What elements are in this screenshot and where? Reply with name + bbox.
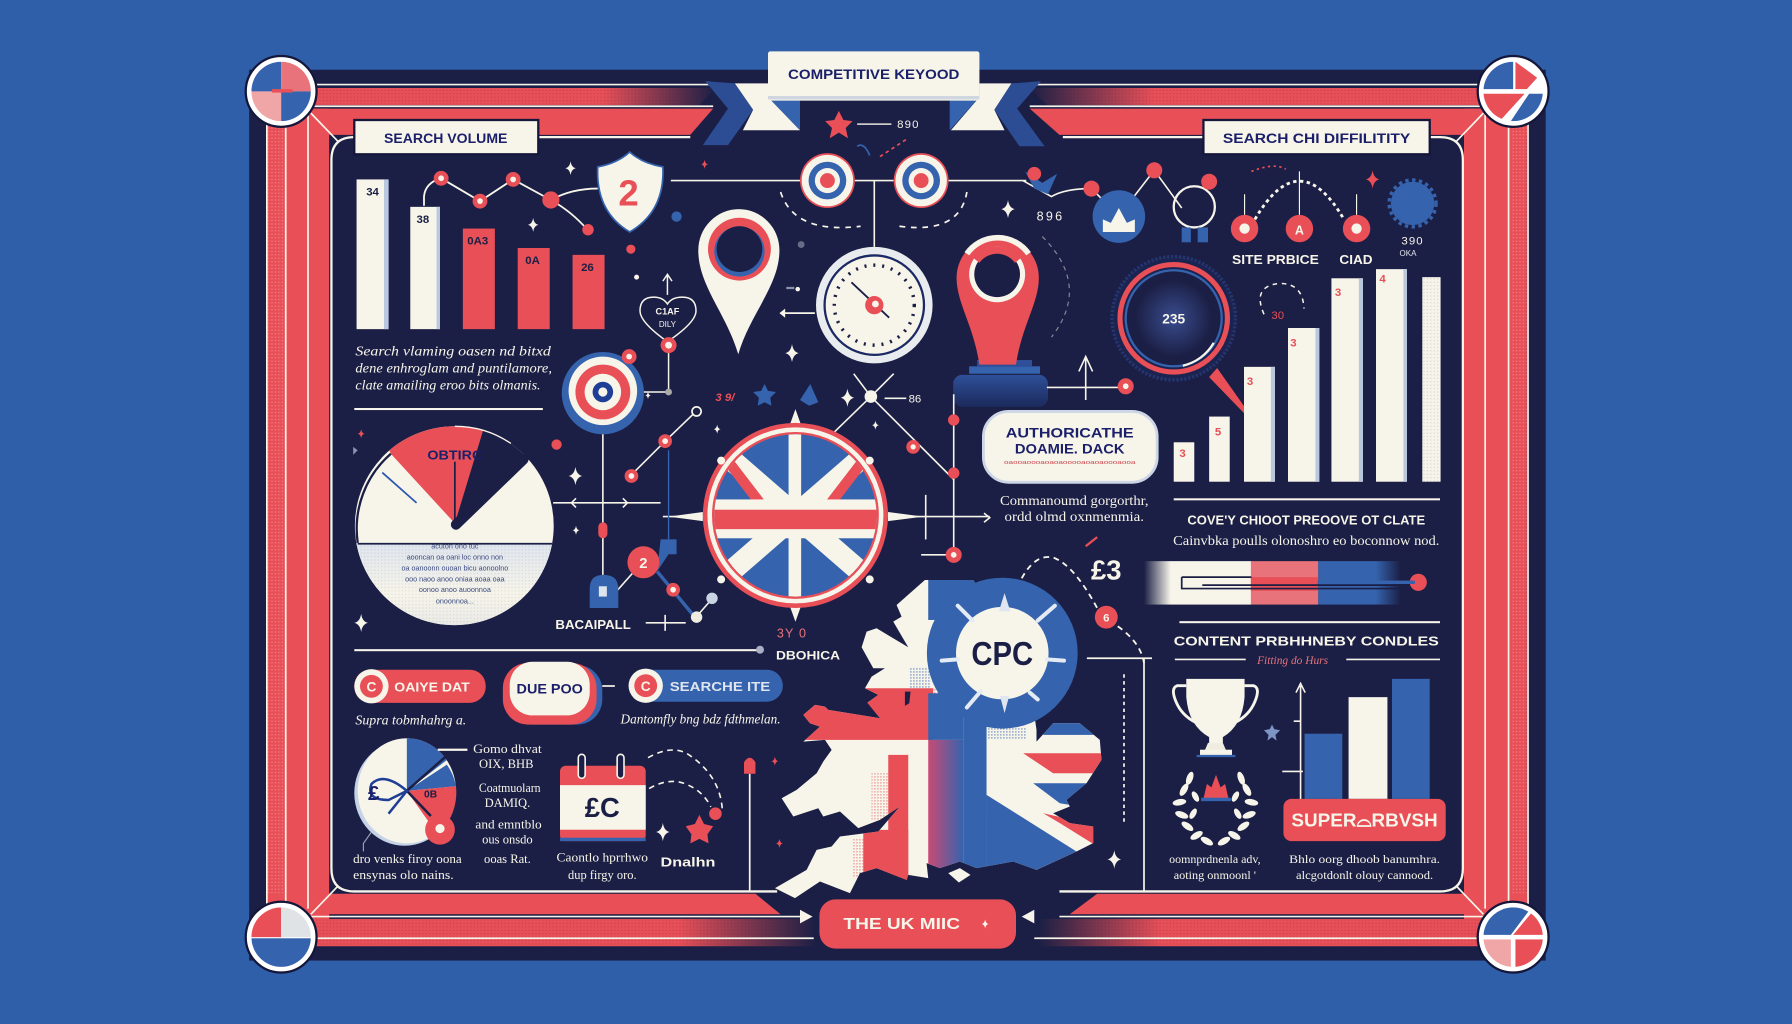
small heart callout: DILY xyxy=(659,320,677,329)
small red star top right xyxy=(1366,170,1379,189)
content freshness heading: CONTENT PRBHHNEBY CONDLES xyxy=(1174,634,1439,649)
big pie chart: OBTIRC xyxy=(427,448,482,462)
big pie chart: oa oanoonn ouoan bicu aonoolno xyxy=(401,563,508,572)
cpc badge xyxy=(927,578,1078,729)
small pie captions: ensynas olo nains. xyxy=(353,868,454,882)
dark frame xyxy=(249,70,1546,961)
search volume bar chart: 34 xyxy=(366,186,380,198)
red and blue accent stars xyxy=(358,111,1306,450)
authoritative badge xyxy=(983,411,1157,482)
pill blue: SEARCHE ITE xyxy=(670,680,770,694)
site price icons: CIAD xyxy=(1339,253,1373,267)
small pie captions: Coatmuolarn xyxy=(479,781,541,795)
pill caption blue: Dantomfly bng bdz fdthmelan. xyxy=(620,711,781,726)
£3 and dashed connector: 6 xyxy=(1103,613,1109,625)
red border frame xyxy=(267,85,1528,946)
covert heading and text: Cainvbka poulls olonoshro eo boconnow nod. xyxy=(1173,533,1439,548)
laurel wreath xyxy=(1172,771,1259,847)
authoritative description: ordd olmd oxnmenmia. xyxy=(1005,509,1144,524)
blue gear: OKA xyxy=(1400,249,1417,258)
corner badge bottom left xyxy=(246,902,317,973)
center labels: DBOHICA xyxy=(776,648,840,662)
corner badge bottom right xyxy=(1478,902,1549,973)
bottom map label: THE UK MIIC xyxy=(843,916,961,933)
right bar chart: 5 xyxy=(1215,426,1222,438)
big pie chart: oonoo anoo auoonnoa xyxy=(419,585,491,594)
authoritative badge: oaooaoooaoaoaooooaoaoaoooaooa xyxy=(1004,460,1137,466)
small pie captions: DAMIQ. xyxy=(485,796,530,810)
center labels xyxy=(776,627,840,662)
search volume bar chart: 0A xyxy=(525,255,540,267)
sparkle and small marks xyxy=(353,161,1121,869)
small pie captions: dro venks firoy oona xyxy=(353,852,462,866)
pill center: DUE POO xyxy=(517,682,583,698)
trophy captions xyxy=(1169,852,1440,882)
shield with number 2: 2 xyxy=(618,173,639,214)
big pie chart: ooo naoo anoo oniaa aoaa oaa xyxy=(405,575,505,584)
big pie chart: acuton ono tuc xyxy=(431,542,479,551)
site price icons: SITE PRBICE xyxy=(1232,253,1319,267)
label backlink: BACAIPALL xyxy=(555,617,631,632)
divider long xyxy=(354,646,764,654)
authoritative badge: DOAMIE. DACK xyxy=(1015,442,1125,458)
pill blue xyxy=(629,669,783,703)
small heart callout xyxy=(640,274,696,395)
trophy captions: Bhlo oorg dhoob banumhra. xyxy=(1289,852,1440,866)
right bar chart: 30 xyxy=(1271,310,1284,322)
small pie chart: 0B xyxy=(424,790,437,801)
uk map xyxy=(775,580,1102,898)
small pie chart xyxy=(354,738,467,851)
line with dots xyxy=(424,171,598,235)
red and blue accent stars: 3 9/ xyxy=(715,392,736,404)
blue gear xyxy=(1389,180,1436,258)
calendar caption: dup firgy oro. xyxy=(568,868,637,882)
title ribbon xyxy=(703,51,1045,146)
search volume bar chart: 0A3 xyxy=(467,236,488,248)
search volume bar chart xyxy=(357,179,605,329)
pill red xyxy=(354,669,486,703)
£3 and dashed connector: £3 xyxy=(1091,554,1122,585)
pill red: C xyxy=(366,679,376,694)
union jack circle xyxy=(669,409,923,622)
search volume bar chart: 26 xyxy=(581,262,594,274)
site price icons xyxy=(1231,166,1373,267)
small pie captions: Gomo dhvat xyxy=(473,742,542,756)
network connectors right xyxy=(832,374,954,555)
search volume heading: SEARCH VOLUME xyxy=(384,131,507,146)
content freshness heading xyxy=(1174,621,1440,667)
right bar chart: 3 xyxy=(1247,376,1253,388)
pin right on base xyxy=(953,237,1069,407)
top targets xyxy=(671,153,1026,247)
vertical marker line xyxy=(744,757,783,891)
calendar caption xyxy=(557,851,648,882)
search difficulty heading xyxy=(1203,120,1430,154)
small pie captions: ous onsdo xyxy=(482,832,533,846)
network nodes right xyxy=(865,390,962,563)
small pie captions xyxy=(353,742,542,882)
right bar chart: 3 xyxy=(1290,337,1297,349)
pill blue: C xyxy=(641,679,651,694)
corner badge top left xyxy=(246,56,317,127)
search volume description: clate amailing eroo bits olmanis. xyxy=(355,378,541,393)
covert heading and text: COVE'Y CHIOOT PREOOVE OT CLATE xyxy=(1187,514,1425,528)
cost progress bar xyxy=(1144,561,1427,605)
authoritative badge: AUTHORICATHE xyxy=(1006,426,1134,442)
search volume bar chart: 38 xyxy=(417,214,429,226)
divider xyxy=(354,408,543,410)
blue gear: 390 xyxy=(1401,236,1424,248)
search volume description: Search vlaming oasen nd bitxd xyxy=(355,343,551,358)
search difficulty heading: SEARCH CHI DIFFILITITY xyxy=(1223,131,1410,146)
network nodes left: 2 xyxy=(639,556,648,572)
title ribbon: COMPETITIVE KEYOOD xyxy=(788,67,959,83)
search volume description xyxy=(355,343,552,393)
big pie chart: aooncan oa oani loc onno non xyxy=(407,552,503,561)
calendar caption: Caontlo hprrhwo xyxy=(557,851,648,865)
gauge xyxy=(779,247,933,363)
calendar: £C xyxy=(585,792,620,823)
trophy captions: alcgotdonlt olouy cannood. xyxy=(1296,868,1433,882)
super label: SUPER⌓RBVSH xyxy=(1291,809,1438,830)
authoritative description xyxy=(1000,493,1149,524)
network connectors left xyxy=(553,411,990,631)
pill caption red: Supra tobmhahrg a. xyxy=(355,713,466,728)
covert heading and text xyxy=(1173,498,1440,548)
red and blue accent stars: 896 xyxy=(1037,210,1064,224)
content freshness heading: Fitting do Hurs xyxy=(1256,655,1329,667)
search volume description: dene enhroglam and puntilamore, xyxy=(355,361,552,376)
£3 and dashed connector xyxy=(1022,537,1144,663)
small pie chart: £ xyxy=(368,782,380,805)
small heart callout: C1AF xyxy=(656,306,680,316)
link arrow up right of base xyxy=(1047,357,1134,400)
small pie captions: and emntblo xyxy=(475,818,542,832)
big pie chart: onoonnoa... xyxy=(436,596,474,605)
pill red: OAIYE DAT xyxy=(394,680,470,694)
right vertical divider and dotted line xyxy=(1087,658,1152,891)
trophy captions: aoting onmoonl ' xyxy=(1174,868,1256,882)
center labels: 3Y 0 xyxy=(777,627,807,641)
network nodes left xyxy=(590,407,718,623)
small pie captions: ooas Rat. xyxy=(484,852,531,866)
trophy xyxy=(1173,679,1257,757)
top right network icons xyxy=(1023,162,1217,243)
dashed arcs and star xyxy=(648,750,722,843)
small star near trophy xyxy=(1264,725,1280,741)
red and blue accent stars: 86 xyxy=(909,393,921,405)
inner panel xyxy=(331,137,1463,891)
bottom map label xyxy=(819,899,1016,949)
authoritative description: Commanoumd gorgorthr, xyxy=(1000,493,1149,508)
shield with number 2 xyxy=(598,152,663,232)
right bar chart: 3 xyxy=(1179,448,1186,460)
cpc badge: CPC xyxy=(971,636,1033,673)
pill center xyxy=(503,662,615,725)
small pie captions: OIX, BHB xyxy=(479,757,534,771)
magnifier: 235 xyxy=(1162,311,1186,326)
pin left xyxy=(698,209,779,354)
right bar chart xyxy=(1174,269,1441,482)
bottom arrows xyxy=(800,910,1034,923)
right bar chart: 4 xyxy=(1379,273,1386,285)
dashed arcs top xyxy=(781,192,967,228)
right bar chart: 3 xyxy=(1335,287,1341,299)
magnifier xyxy=(1112,257,1245,414)
site price icons: A xyxy=(1295,223,1304,237)
search volume heading xyxy=(354,120,538,154)
infographic canvas xyxy=(244,51,1550,974)
red and blue accent stars: 890 xyxy=(897,119,920,131)
target icon left xyxy=(562,349,644,434)
corner badge top right xyxy=(1478,56,1549,127)
label penalty: Dnalhn xyxy=(661,855,715,869)
calendar xyxy=(560,754,646,841)
freshness bar chart xyxy=(1282,679,1430,800)
super label xyxy=(1283,799,1446,841)
trophy captions: oomnprdnenla adv, xyxy=(1169,852,1261,866)
big pie chart xyxy=(354,426,554,626)
